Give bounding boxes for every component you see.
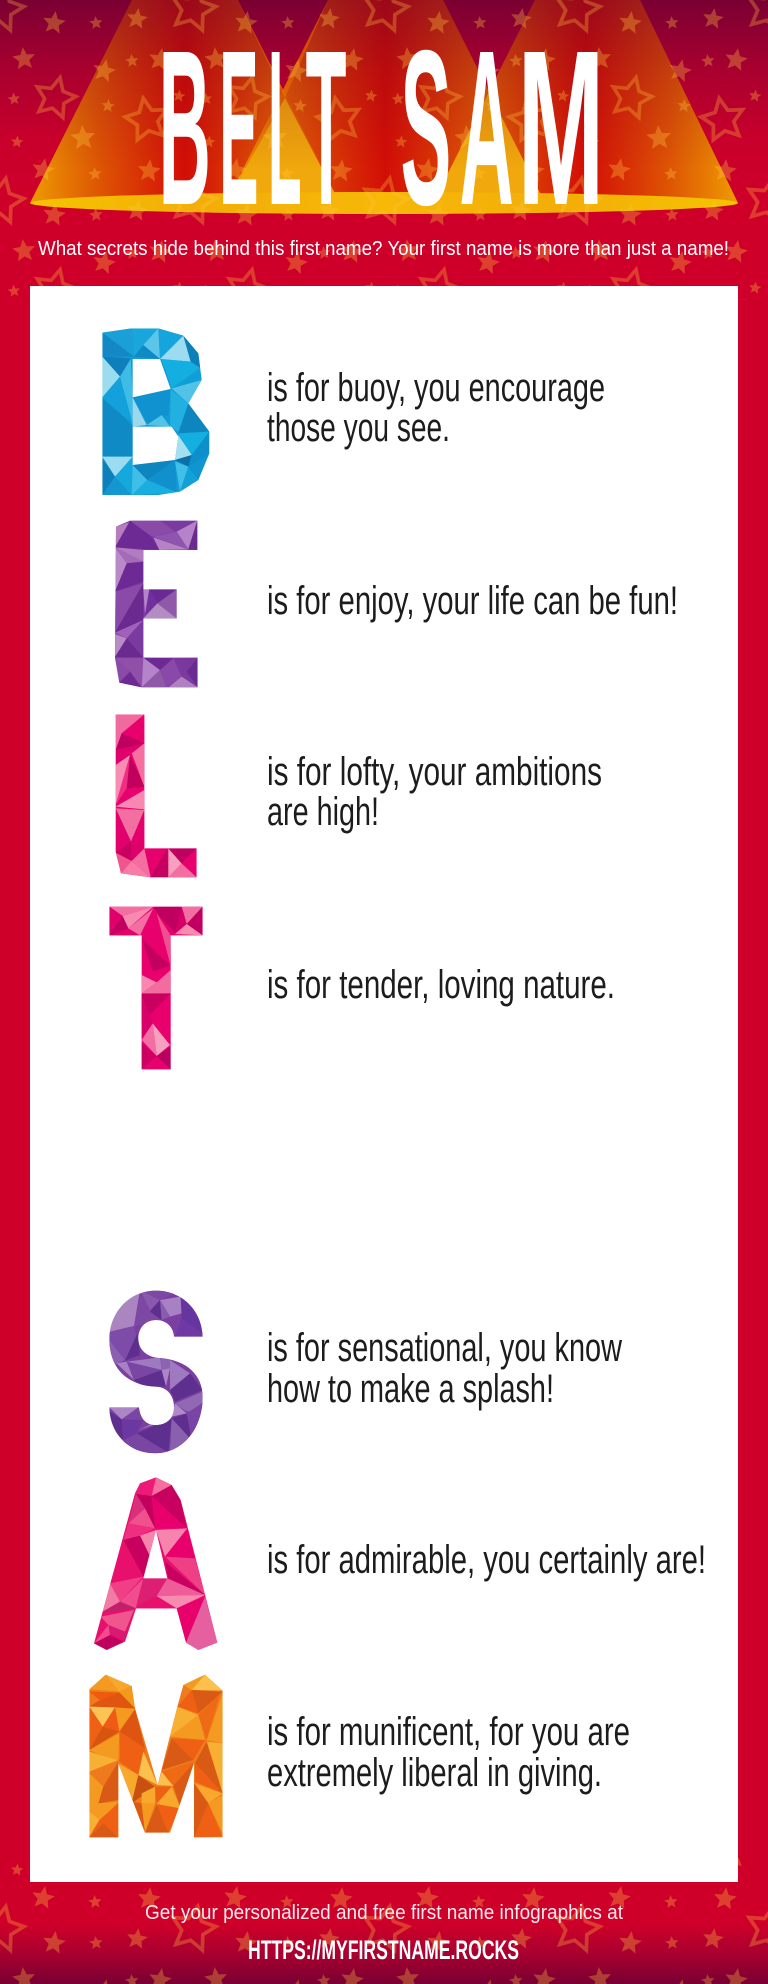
letter M icon xyxy=(87,1673,225,1840)
text: B line xyxy=(267,366,605,450)
text: L line: is for lofty, your ambitions xyxy=(267,750,602,794)
star pattern: bottom band xyxy=(0,1858,768,1984)
star pattern: top band xyxy=(0,0,768,300)
text: B line: is for buoy, you encourage xyxy=(267,366,605,410)
title: T xyxy=(306,4,346,251)
white panel xyxy=(30,286,738,1882)
text: M xyxy=(518,4,604,251)
letter B icon xyxy=(102,328,210,495)
letter L icon xyxy=(113,713,200,880)
letter A icon xyxy=(92,1475,220,1652)
text: M line: extremely liberal in giving. xyxy=(267,1751,602,1795)
title xyxy=(159,4,604,251)
text: S line: is for sensational, you know xyxy=(267,1326,622,1370)
title: A xyxy=(460,4,514,251)
text: M line: is for munificent, for you are xyxy=(267,1710,630,1754)
spotlights xyxy=(30,0,738,214)
text: T line: is for tender, loving nature. xyxy=(267,963,615,1007)
title: B xyxy=(159,4,211,251)
title: L xyxy=(268,4,302,251)
letter S icon xyxy=(109,1290,203,1454)
footer text: Get your personalized and free first name infographics at xyxy=(145,1902,623,1924)
text: L line: are high! xyxy=(267,790,379,834)
title: S xyxy=(400,4,451,251)
text: M line xyxy=(267,1710,630,1795)
text: B line: those you see. xyxy=(267,406,450,450)
text: S line xyxy=(267,1326,622,1411)
letter E icon xyxy=(115,520,198,688)
subtitle: What secrets hide behind this first name? Your first name is more than just a name! xyxy=(38,238,729,260)
text: L line xyxy=(267,750,602,834)
letter T icon xyxy=(107,903,207,1073)
text: S line: how to make a splash! xyxy=(267,1367,554,1411)
title: E xyxy=(219,4,258,251)
footer url: HTTPS://MYFIRSTNAME.ROCKS xyxy=(248,1935,519,1965)
